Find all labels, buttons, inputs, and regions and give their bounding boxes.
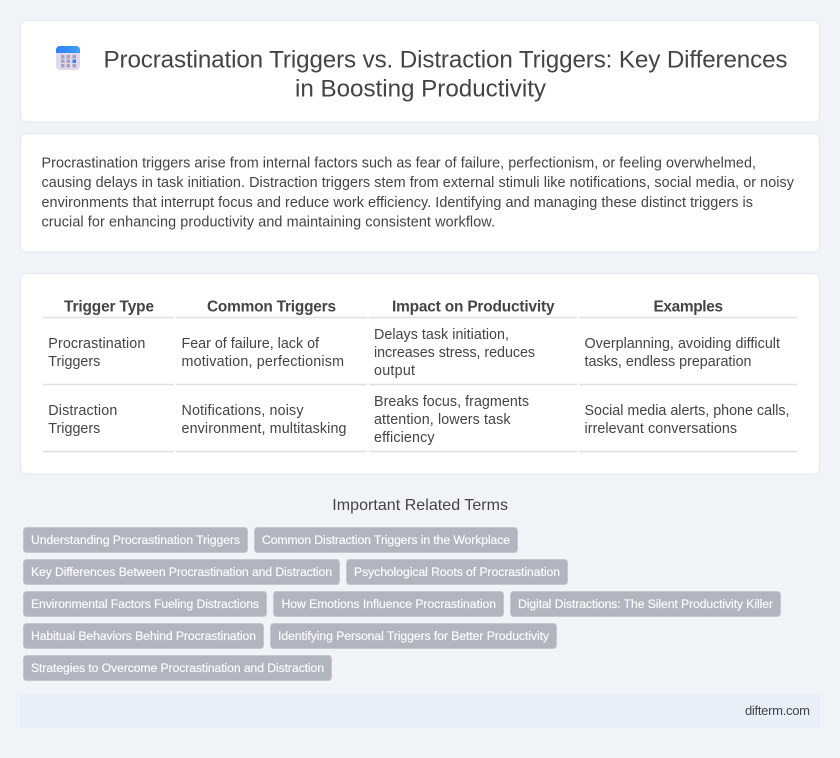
- tag: Psychological Roots of Procrastination: [354, 565, 560, 579]
- footer: difterm.com: [745, 703, 810, 718]
- tag: Strategies to Overcome Procrastination and Distraction: [31, 661, 324, 675]
- table row: procrastination triggers: Fear of failure, lack of: [182, 336, 319, 352]
- table row: distraction triggers: Distraction: [48, 403, 117, 419]
- table row: distraction triggers: Breaks focus, fragments: [374, 394, 529, 410]
- text block: summary: [42, 156, 795, 230]
- tag: [24, 592, 266, 616]
- text block: summary: causing delays in task initiation. Distraction triggers stem from external stimuli like notifications, social media, or noisy: [42, 175, 795, 191]
- tag: Habitual Behaviors Behind Procrastination: [31, 629, 256, 643]
- table row: distraction triggers: efficiency: [374, 430, 435, 446]
- table header: Common Triggers: [207, 299, 336, 316]
- table row: distraction triggers: [48, 394, 790, 446]
- tag: Digital Distractions: The Silent Productivity Killer: [518, 597, 773, 611]
- text block: summary: Procrastination triggers arise from internal factors such as fear of failure, perfectionism, or feeling overwhelmed,: [42, 156, 756, 172]
- tag: [254, 528, 518, 552]
- title: Procrastination Triggers vs. Distraction Triggers: Key Differences: [104, 46, 788, 74]
- table row: procrastination triggers: motivation, perfectionism: [182, 354, 344, 370]
- table row: procrastination triggers: tasks, endless preparation: [584, 354, 752, 370]
- tag: [24, 560, 340, 584]
- tag: [510, 592, 780, 616]
- table row: distraction triggers: irrelevant conversations: [584, 421, 737, 437]
- table row: distraction triggers: Social media alerts, phone calls,: [584, 403, 790, 419]
- tag: [24, 656, 332, 680]
- panel: summary paragraph: [20, 134, 820, 252]
- panel: related term tags: [24, 528, 780, 680]
- table header: Examples: [654, 299, 723, 316]
- table row: procrastination triggers: [48, 327, 780, 379]
- title: [104, 46, 788, 103]
- panel: title card: [20, 20, 820, 122]
- table row: procrastination triggers: increases stress, reduces: [374, 345, 535, 361]
- tag: Key Differences Between Procrastination and Distraction: [31, 565, 332, 579]
- text block: summary: environments that interrupt focus and reduce work efficiency. Identifying and managing these distinct triggers is: [42, 195, 753, 211]
- table row: distraction triggers: Notifications, noisy: [182, 403, 304, 419]
- tag: [270, 624, 556, 648]
- tag: Common Distraction Triggers in the Workplace: [262, 533, 510, 547]
- tag: How Emotions Influence Procrastination: [282, 597, 496, 611]
- table row: procrastination triggers: Overplanning, avoiding difficult: [584, 336, 780, 352]
- heading: related terms: Important Related Terms: [332, 497, 508, 514]
- table row: procrastination triggers: Triggers: [48, 354, 100, 370]
- tag: [24, 624, 264, 648]
- table row: procrastination triggers: Delays task initiation,: [374, 327, 509, 343]
- icon: calendar: [56, 46, 80, 70]
- table header: [64, 299, 723, 316]
- table row: procrastination triggers: Procrastination: [48, 336, 145, 352]
- table header: Impact on Productivity: [392, 299, 555, 316]
- table row: distraction triggers: environment, multitasking: [182, 421, 347, 437]
- tag: [274, 592, 504, 616]
- table row: distraction triggers: Triggers: [48, 421, 100, 437]
- tag: [24, 528, 248, 552]
- tag: [346, 560, 568, 584]
- tag: Understanding Procrastination Triggers: [31, 533, 240, 547]
- table row: distraction triggers: attention, lowers task: [374, 412, 511, 428]
- tag: Environmental Factors Fueling Distractions: [31, 597, 259, 611]
- table header: Trigger Type: [64, 299, 154, 316]
- table row: procrastination triggers: output: [374, 363, 415, 379]
- title: in Boosting Productivity: [295, 76, 547, 103]
- footer: [20, 694, 820, 728]
- text block: summary: crucial for enhancing productivity and maintaining consistent workflow.: [42, 214, 495, 230]
- tag: Identifying Personal Triggers for Better Productivity: [278, 629, 550, 643]
- panel: comparison table: [20, 274, 820, 474]
